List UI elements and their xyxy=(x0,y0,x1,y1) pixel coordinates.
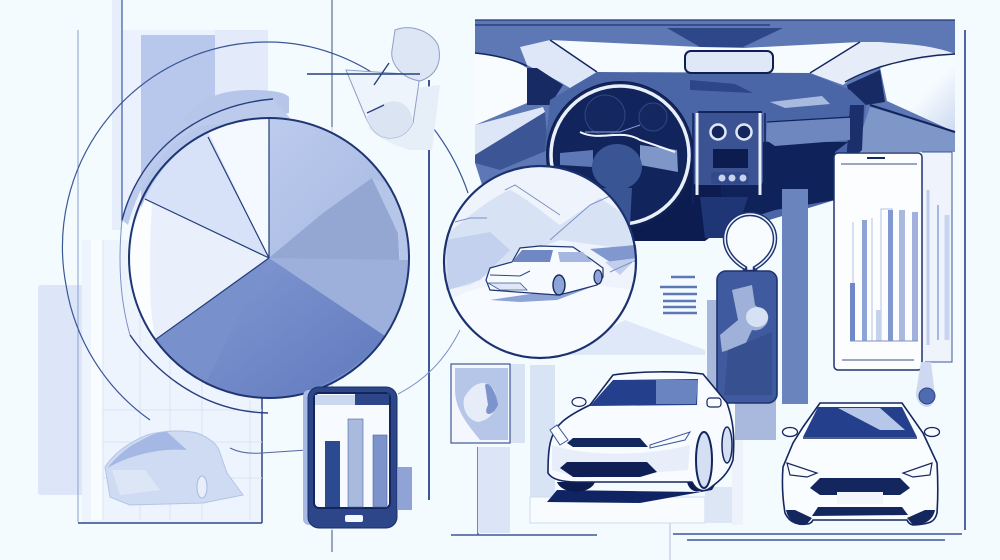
dashboard: left door panel xyxy=(475,107,545,155)
dashboard: windshield xyxy=(550,40,860,73)
dashboard: center console xyxy=(693,112,765,238)
dashboard: dash highlights xyxy=(770,96,830,108)
vignette: small car xyxy=(486,246,603,302)
icon: small framed picture xyxy=(451,364,510,443)
dashboard: pillar openings xyxy=(527,68,885,105)
illustration: large outer ring xyxy=(62,42,468,420)
dashboard: left window xyxy=(475,53,527,125)
dashboard: base shell xyxy=(475,20,955,241)
illustration: car dashboard interior xyxy=(475,20,955,241)
icon: horizontal text lines xyxy=(660,277,697,313)
dashboard: roof console xyxy=(667,28,783,47)
illustration: car front view xyxy=(782,403,940,525)
icon: drop pendant xyxy=(916,362,935,407)
icon: keychain xyxy=(717,214,777,403)
icon: smartphone bar chart xyxy=(303,387,412,528)
dashboard: right pillar xyxy=(810,42,955,85)
panel: left background blocks xyxy=(38,0,289,522)
dashboard: lower dark footwell xyxy=(720,142,848,226)
chart: pie chart xyxy=(129,118,409,398)
illustration: car three-quarter view xyxy=(547,372,734,503)
panel: tall bar xyxy=(782,189,808,404)
panel: pale strips around keychain xyxy=(707,300,776,440)
dashboard: left pillar xyxy=(520,40,597,88)
dashboard: right window xyxy=(880,54,955,132)
icon: tablet bar chart xyxy=(834,152,952,370)
dashboard: steering wheel xyxy=(547,82,693,228)
illustration: circular car vignette xyxy=(444,166,637,358)
panel: pale rectangles behind middle cars xyxy=(478,320,743,533)
dashboard: rear-view mirror xyxy=(685,51,773,73)
dashboard: top highlight line xyxy=(475,20,955,25)
dashboard: main dash xyxy=(545,72,866,241)
illustration: faded sketch car with grid xyxy=(103,240,307,520)
dashboard: right door xyxy=(855,107,955,152)
icon: glass sphere and lens xyxy=(307,28,440,150)
